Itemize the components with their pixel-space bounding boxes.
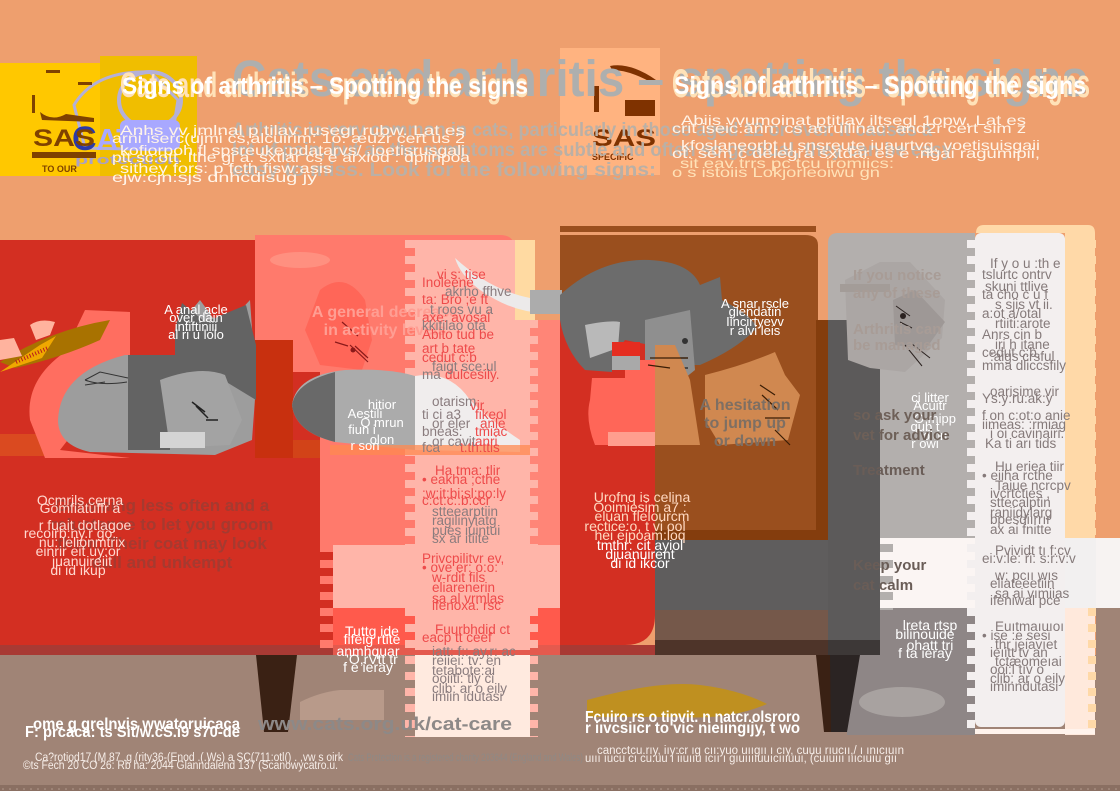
icon: cat outline: C bbox=[72, 120, 97, 158]
list: right column text: cedut c:b, bbox=[982, 345, 1041, 360]
list: pink column text: Abito tud be bbox=[422, 327, 494, 342]
label: grooming grey bbox=[51, 496, 273, 572]
footer: left white bold text: ome g grelnvis wwatoruicaca bbox=[33, 716, 240, 733]
label: white middle cluster: hitior bbox=[368, 397, 397, 412]
intro text: left overlay: arni iserc(ujmi cs,alcuirim: 1o: æuzr cert us 2 bbox=[112, 130, 465, 146]
label: middle bottom overlay: hei ejpoam:loq bbox=[594, 527, 686, 543]
list: right column text: eliateeetiin bbox=[990, 576, 1055, 591]
label: white left cluster: infiftiniii bbox=[175, 319, 217, 334]
title: left glitched heading bbox=[120, 66, 528, 105]
label: middle bottom overlay: eluan flelourcm bbox=[595, 508, 689, 524]
label: grooming pink overlay: r fuait dotlagoe bbox=[39, 517, 132, 533]
label: white grey panel cluster: ci litter bbox=[911, 390, 949, 405]
list: right column text: a:ot a/otal bbox=[982, 306, 1041, 321]
label: white left cluster: al ri u lolo bbox=[168, 327, 224, 342]
label: grooming grey: dull and unkempt bbox=[92, 553, 233, 572]
footer: references: Cats Protection is a registered charity 203644 (England and Wales) bbox=[348, 752, 583, 764]
list: pink column text bbox=[422, 267, 516, 704]
label: middle bottom overlay: di id ikcor bbox=[610, 555, 670, 571]
list: pink column text: reiiei: tv: en bbox=[432, 653, 501, 668]
list: pink column text: stteearptiin bbox=[432, 504, 498, 519]
list: right column text: i oi cavinairi. bbox=[990, 426, 1064, 441]
list: right column text: ieıitt tv an bbox=[990, 645, 1048, 660]
list: pink column text: • eakha ;cthe bbox=[422, 472, 500, 487]
chair legs bbox=[256, 655, 860, 732]
list: right column text: tctæomeıai bbox=[995, 654, 1062, 669]
list: right column text: ta cho c u f bbox=[982, 287, 1048, 302]
label: lower right white: lreta rtsp bbox=[903, 617, 957, 633]
footer: references: Ca?rotiod17 (M 87 .g (rity36-(Enod .(.Ws) a SC(711:otl() . ,vw s oirk bbox=[35, 752, 343, 764]
list: pink column text: akrho ffhve bbox=[445, 284, 512, 299]
list: pink column text: anle bbox=[480, 416, 506, 431]
intro text: right overlay: crit iseic:ann: cs acruilinac: and2r cert sim z bbox=[672, 120, 1026, 136]
list: pink column text: kkitilao ota bbox=[422, 318, 486, 333]
label: lower left white: f e ieray bbox=[343, 659, 393, 675]
panel: red sofa base bbox=[0, 240, 655, 655]
label: general decrease in activity: in activity levels bbox=[324, 322, 446, 339]
list: pink column text: ma bbox=[422, 367, 441, 382]
title: grey heading: Cats and arthritis – spotting the signs bbox=[232, 50, 1088, 107]
list: right column text: ooi:l tıv o bbox=[990, 662, 1044, 677]
illustration: grey sleeping cat bbox=[29, 300, 256, 458]
footer: right white bold text bbox=[585, 709, 800, 737]
footer: right white bold text: r iıvcsiıcr to vic nieiıngıjy, t wo bbox=[585, 720, 800, 737]
list: pink column text: • ove er: o:o: bbox=[422, 560, 498, 575]
illustration: salmon cat in red bbox=[588, 342, 655, 446]
label: middle bottom overlay: djuanuirent bbox=[605, 546, 675, 562]
list: right column text: rtiiti:arote bbox=[995, 316, 1051, 331]
label: white middle cluster: Aestili bbox=[348, 406, 382, 421]
list: pink column text: ragilinyiatg bbox=[432, 513, 497, 528]
list: right column text: If y o u :th e bbox=[990, 256, 1061, 271]
intro text: right overlay: Abiis vvumoinat ptitlav iltsegl 1opw, Lat es bbox=[681, 112, 1026, 128]
footer: web address: www.cats.org.uk/cat-care bbox=[257, 714, 512, 734]
list: pink column text: Privcpilitvr ev, bbox=[422, 551, 504, 566]
list: right column text: raniidylarg bbox=[990, 505, 1052, 520]
intro text: right overlay: kfoslaneorbt u snsreute iuaurtvg, voetisuisgaii bbox=[681, 137, 1040, 153]
logo: yellow panel bbox=[0, 56, 197, 176]
floor shadows bbox=[300, 684, 945, 720]
list: pink column text: or cavit bbox=[432, 434, 476, 449]
title: left glitched heading: Signs of arthritis – Spotting the signs bbox=[122, 73, 528, 100]
label: white middle cluster bbox=[348, 397, 404, 453]
list: pink column text: anri bbox=[475, 434, 498, 449]
title: left glitched heading: Cats and arthritis - spotting the signs bbox=[120, 66, 528, 105]
list: faint text on grey panel: be managed bbox=[853, 337, 941, 354]
logo: orange panel bbox=[560, 48, 660, 175]
label: white right cluster: A snar rscle bbox=[721, 296, 789, 311]
label: white right cluster: Iincirtyevv bbox=[726, 314, 784, 329]
label: grooming pink overlay: di id ikup bbox=[50, 562, 106, 578]
list: pink column text: fca bbox=[422, 440, 441, 455]
list: right column text: clib: ar o eily bbox=[990, 671, 1065, 686]
list: pink column text: eacp tt ceef bbox=[422, 630, 492, 645]
list: right column text: Pvividt tı f:cv bbox=[995, 543, 1071, 558]
list: pink column text: faigt sce:ul bbox=[432, 359, 497, 374]
label: white grey panel cluster: r owi bbox=[911, 436, 939, 451]
list: pink column text: :w:it:bi:sl:po:ly bbox=[422, 486, 506, 501]
label: middle bottom overlay: tmthr: cit ayiol bbox=[597, 537, 683, 553]
list: right column text: iminndutasi bbox=[990, 679, 1058, 694]
label: a hesitation to jump: A hesitation bbox=[700, 397, 790, 414]
intro text: right overlay bbox=[672, 112, 1040, 180]
icon: brown stamp bbox=[32, 70, 96, 174]
list: right column text: tslurtc ontrv bbox=[982, 267, 1052, 282]
label: lower left white: anmhquar bbox=[336, 643, 400, 659]
footer: references: uııı ıucu cı cu:uu ı iıuııu ıcıı ı gıuııııuuıcıııuuı, (cuıuııı ıııcıuıu gıı bbox=[585, 753, 897, 765]
intro text: left overlay: Anhs vv jmlnal p tilav rusegr rubw. Lat es bbox=[120, 122, 465, 138]
intro text: right overlay: o s istoiis Lokjorleoiwu gn bbox=[672, 164, 880, 180]
intro text: left overlay: sithey fors: p fcth fisw:asis bbox=[120, 160, 332, 176]
footer: references bbox=[23, 745, 904, 772]
list: right column text: oarisime vir bbox=[990, 384, 1060, 399]
label: middle bottom overlay: Urofnq is celina bbox=[594, 489, 690, 505]
list: faint text on grey panel: vet for advice bbox=[853, 427, 950, 444]
list: right column text: ax ai fnitte bbox=[990, 522, 1052, 537]
list: pink column text: pues iuintui bbox=[432, 523, 500, 538]
label: grooming pink overlay: nu: lelionmtrix bbox=[39, 534, 125, 550]
intro text: left overlay bbox=[112, 122, 470, 185]
logo: orange panel: SAS bbox=[592, 125, 656, 152]
list: pink column text: tmiac bbox=[475, 424, 508, 439]
list: right column text: Euıtmaıuıoı bbox=[995, 619, 1064, 634]
list: pink column text: ifenoxa: rsc bbox=[432, 598, 501, 613]
list: right column text: iimeas: :rmiag bbox=[982, 417, 1066, 432]
list: pink column text: vi s: tise bbox=[437, 267, 486, 282]
panel: salmon card bbox=[255, 235, 560, 737]
list: pink column text: t.th:ttis bbox=[460, 440, 500, 455]
label: grooming grey: Grooming less often and a bbox=[55, 496, 270, 515]
label: a hesitation to jump: or down bbox=[714, 433, 776, 450]
label: a hesitation to jump: to jump up bbox=[704, 415, 786, 432]
list: pink column text: t roos vu a bbox=[430, 302, 494, 317]
list: right column text: :aigs crsful bbox=[990, 349, 1055, 364]
list: pink column text: Fuurbhdid ct bbox=[435, 622, 510, 637]
illustration: grey walking cat body bbox=[292, 370, 530, 455]
intro text: grey: lot of pain, but as the symptoms are subtle and often so gradual, they can be easy bbox=[232, 140, 952, 161]
label: grooming pink overlay bbox=[24, 492, 132, 578]
list: right column text: ifeniwal pce bbox=[990, 593, 1061, 608]
intro text: left overlay: ptt sc:ott. Ithe gi a. sxtlar cs e arxiod : dpiinpoa bbox=[112, 149, 470, 165]
label: white middle cluster: O mrun bbox=[360, 415, 404, 430]
list: right column text: ei:v:le: ri: s:r:v:v bbox=[982, 551, 1076, 566]
label: middle bottom overlay: Ooimiesim a7 : bbox=[593, 499, 687, 515]
list: pink column text: clib: ar o eily bbox=[432, 681, 507, 696]
label: lower left white: 'O,rVtt tr bbox=[346, 651, 398, 667]
list: faint text on grey panel bbox=[853, 267, 950, 594]
list: pink column text: imiin idutasi bbox=[432, 689, 503, 704]
illustration: orange cat bbox=[648, 345, 800, 445]
list: pink column text: ta: Bro ;e ft bbox=[422, 292, 488, 307]
list: right column text: sttecalptin bbox=[990, 495, 1051, 510]
label: white grey panel cluster: olon bbox=[923, 428, 947, 443]
panel: grey card bbox=[828, 225, 1096, 735]
list: pink column text: otarism bbox=[432, 394, 476, 409]
list: pink column text: tetabote:ai bbox=[432, 663, 495, 678]
list: pink column text: ti ci a3 bbox=[422, 407, 461, 422]
illustration: grey cat head bbox=[840, 262, 945, 372]
footer: left white bold text: F: prcaca: ts Sit/w.cS.i9 s70-de bbox=[25, 724, 240, 741]
footer: references: cancctcu.rıy, iıy:cr ıg cıı:yuo uııgıı ı cıy, cuuu rıucıı,/ ı ınıcıuın bbox=[597, 745, 904, 757]
title: right glitched heading: Signs of arthritis – Spotting the signs bbox=[674, 72, 1086, 100]
label: lower right white: bilinouide bbox=[895, 626, 955, 642]
label: white right cluster bbox=[721, 296, 789, 338]
footer: references: ©ts Fech 20 CO 26: Rb ha: 2044 Glanndalend 137 (Scanowycatro.u. bbox=[23, 760, 338, 772]
list: pink column text: cedut c:b bbox=[422, 350, 477, 365]
intro text: right overlay: ot: sem c delegra sxtdar es e .rigai ragumipii, bbox=[672, 145, 1040, 161]
list: pink column text: iatt: f:: ay,r: ac bbox=[432, 644, 516, 659]
list: pink column text: ooiiti: tly ci bbox=[432, 671, 494, 686]
label: grooming grey: reluctance to let you groom bbox=[51, 515, 273, 534]
label: white grey panel cluster bbox=[911, 390, 956, 451]
list: right column text: • ise :e sesi bbox=[982, 628, 1051, 643]
label: grooming pink overlay: recoirb:ny.r go: bbox=[24, 525, 116, 541]
intro text: left overlay: kofiorpoh tl spsreuke:pdatarvs/ ,ioetisrusgali bbox=[120, 142, 465, 158]
list: pink column text: art b tate bbox=[422, 341, 475, 356]
icon: cat outline: ATS bbox=[96, 122, 156, 157]
list: pink column text: or eler bbox=[432, 416, 471, 431]
list: right column text: s sjis vt ii. bbox=[995, 297, 1053, 312]
label: white left cluster: A anal acle bbox=[164, 302, 228, 317]
label: lower left white bbox=[336, 623, 401, 675]
list: faint text on grey panel: Treatment bbox=[853, 462, 925, 479]
label: lower left white: Tuttg ide bbox=[345, 623, 399, 639]
list: right column text: • eiiha rcthe bbox=[982, 468, 1053, 483]
intro text: grey: Arthritis is very common in cats, particularly in those aged 12 or over. It causes a bbox=[232, 120, 932, 141]
intro text: grey bbox=[232, 120, 952, 181]
list: pink column text: sx ar itiite bbox=[432, 531, 489, 546]
list: faint text on grey panel: Arthritis can bbox=[853, 321, 941, 338]
list: pink column text: Ha tma: tlir bbox=[435, 463, 501, 478]
footer: left white bold text bbox=[25, 716, 240, 741]
list: right column text: ivcrtcties , bbox=[990, 486, 1050, 501]
list: right column text: iri h itane bbox=[995, 337, 1050, 352]
intro text: grey: easy to miss. Look for the following signs: bbox=[232, 160, 656, 181]
label: general decrease in activity: A general decrease bbox=[312, 304, 458, 321]
list: right column text: Hu eriea tiir bbox=[995, 459, 1065, 474]
intro text: left overlay: ejw:cjn:sjs dnhcdisug jy bbox=[112, 169, 317, 185]
list: pink column text: c:ct:c::b:ccr bbox=[422, 493, 491, 508]
label: middle bottom overlay: rectice:o, t vi ool bbox=[584, 518, 686, 534]
label: grooming pink overlay: juanuireiit bbox=[51, 553, 112, 569]
list: pink column text: fikeol bbox=[475, 407, 507, 422]
list: right column text: Ka ti arı tids bbox=[985, 436, 1057, 451]
label: white middle cluster: olon bbox=[370, 432, 394, 447]
label: general decrease in activity bbox=[312, 304, 458, 339]
list: pink column text: Inoleene bbox=[422, 275, 474, 290]
list: faint text on grey panel: If you notice bbox=[853, 267, 941, 284]
icon: brown stamp: TO OUR bbox=[42, 164, 77, 174]
label: white grey panel cluster: qub t bbox=[911, 419, 940, 434]
logo: orange panel: SPECIFIC bbox=[592, 152, 634, 162]
icon: brown stamp: SAS bbox=[33, 125, 95, 152]
list: faint text on grey panel: any of these bbox=[853, 285, 941, 302]
icon: cat outline: protection bbox=[75, 152, 180, 167]
label: middle bottom overlay bbox=[584, 489, 690, 571]
list: right column text: w: pcıı wıs bbox=[994, 568, 1058, 583]
label: grooming pink overlay: Ocmrils cerna bbox=[37, 492, 123, 508]
label: grooming pink overlay: einrir eit uy:or bbox=[36, 543, 121, 559]
label: white grey panel cluster: O mipp bbox=[914, 411, 956, 426]
list: pink column text: bneas: bbox=[422, 424, 463, 439]
illustration: salmon cat head bbox=[270, 252, 372, 370]
list: faint text on grey panel: so ask your bbox=[853, 407, 937, 424]
list: pink column text: sa al vrmlas bbox=[432, 591, 504, 606]
list: right column text: Taiue ncrcpv bbox=[995, 478, 1071, 493]
list: pink column text: eliarenerin bbox=[432, 580, 495, 595]
list: right column text: thr jeiavıet bbox=[995, 637, 1058, 652]
list: pink column text: axe: avosal bbox=[422, 310, 490, 325]
label: white right cluster: glendatin bbox=[729, 304, 781, 319]
label: white middle cluster: r son bbox=[351, 438, 379, 453]
label: lower right white: ohatt tri bbox=[907, 637, 953, 653]
label: grooming pink overlay: Gomfiatuffr a bbox=[40, 500, 121, 516]
label: lower right white bbox=[895, 617, 957, 661]
label: white left cluster bbox=[164, 302, 228, 342]
intro text: right overlay: sit eav trrs pc tcu iromiics: bbox=[680, 155, 894, 171]
list: faint text on grey panel: Keep your bbox=[853, 557, 927, 574]
label: white grey panel cluster: Acuitr bbox=[913, 398, 947, 413]
label: a hesitation to jump bbox=[700, 397, 790, 450]
label: grooming grey: them. Their coat may look bbox=[57, 534, 267, 553]
list: right column text: Ys:y:ru:ak:y bbox=[982, 391, 1053, 406]
list: right column text: f on c:ot:o anie bbox=[982, 408, 1071, 423]
list: right column text: bpesdiırrır bbox=[990, 512, 1051, 527]
list: faint text on grey panel: cat calm bbox=[853, 577, 913, 594]
list: pink column text: vir bbox=[470, 398, 485, 413]
label: white middle cluster: fiun i bbox=[348, 422, 376, 437]
label: white left cluster: over dain bbox=[169, 310, 223, 325]
list: pink column text: dulcesily. bbox=[445, 367, 500, 382]
label: lower right white: f ta ieray bbox=[898, 645, 952, 661]
panel: brown card bbox=[560, 226, 830, 655]
illustration: grey tail and stretching cat bbox=[455, 258, 756, 395]
list: right column text: Anrs cin b bbox=[982, 327, 1042, 342]
list: right column text: skuni ttlive bbox=[985, 279, 1048, 294]
label: lower left white: fifeig rtite bbox=[344, 631, 401, 647]
illustration: toy fish bbox=[0, 320, 110, 372]
list: pink column text: w-rdit fils bbox=[431, 570, 485, 585]
list: right column text bbox=[982, 256, 1076, 694]
label: white right cluster: r alvi leis bbox=[730, 323, 781, 338]
list: right column text: mma dliccsfily bbox=[982, 358, 1066, 373]
list: right column text: sa ai vımiias bbox=[995, 586, 1070, 601]
footer: right white bold text: Fcuiro rs o tipvit. n natcr.olsroro bbox=[585, 709, 800, 726]
icon: cat outline bbox=[72, 72, 181, 167]
